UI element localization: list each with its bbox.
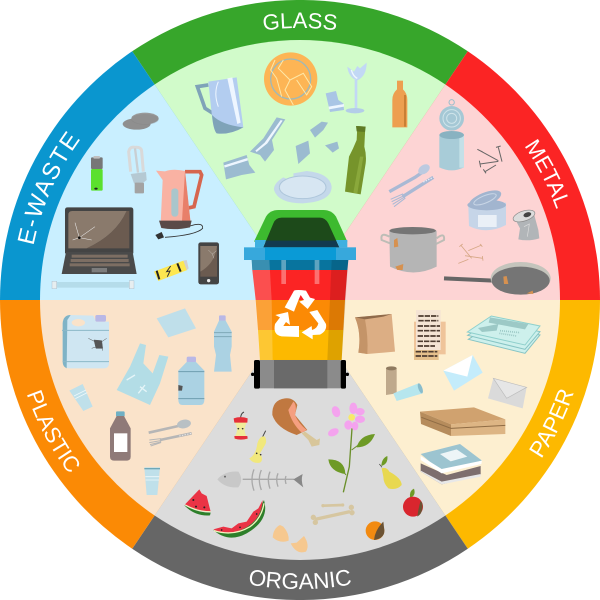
icon: cardboard box xyxy=(420,407,505,436)
icon: copper nails xyxy=(458,244,483,263)
icon: rotten orange xyxy=(366,521,384,540)
bin body xyxy=(252,260,348,360)
icon: water bottle xyxy=(214,315,232,372)
icon: bones xyxy=(311,503,355,525)
label: PAPER: PAPER xyxy=(529,390,574,458)
icon: energy-saving bulb xyxy=(129,147,147,193)
label: ORGANIC: ORGANIC xyxy=(250,570,351,590)
label: GLASS: GLASS xyxy=(264,12,336,30)
icon: cardboard tube xyxy=(386,366,397,395)
icon: cracked orange plate xyxy=(264,52,317,106)
icon: plastic canister xyxy=(62,315,109,368)
icon: orange bottle xyxy=(392,81,407,127)
icon: spoon and fork xyxy=(389,162,433,207)
icon: apple core xyxy=(234,412,248,440)
icon: broken glass plate xyxy=(274,171,332,203)
icon: rusty pot xyxy=(381,227,444,272)
icon: grey nails xyxy=(477,146,502,173)
icon: watermelon rind xyxy=(213,500,265,538)
bin lid xyxy=(254,210,347,247)
icon: pink flower xyxy=(327,403,375,492)
panel: organic items xyxy=(184,398,423,552)
icon: button cell coins xyxy=(123,113,159,130)
icon: broken bottle neck xyxy=(250,117,285,162)
icon: rolled paper xyxy=(393,383,424,401)
icon: glass shards xyxy=(296,122,339,164)
icon: grey envelope xyxy=(488,378,527,408)
icon: broken goblet xyxy=(346,63,367,113)
panel: plastic items xyxy=(62,308,232,495)
icon: crushed can xyxy=(512,208,539,240)
icon: green wine bottle xyxy=(345,126,366,194)
label: METAL: METAL xyxy=(525,139,568,209)
icon: cracked laptop xyxy=(62,207,137,274)
panel: glass items xyxy=(197,52,407,203)
icon: plastic cup tilted xyxy=(69,384,93,411)
icon: receipts xyxy=(414,310,446,360)
icon: pink kettle xyxy=(155,170,203,239)
icon: glass shard with stripe xyxy=(326,91,344,112)
label: PLASTIC: PLASTIC xyxy=(27,390,80,472)
icon: open tin can xyxy=(439,100,464,170)
icon: recycling symbol xyxy=(275,290,326,339)
icon: yellow AA battery xyxy=(154,260,189,281)
panel: metal items xyxy=(381,100,551,295)
icon: brown bottle xyxy=(110,411,131,461)
bin base and wheels xyxy=(251,360,349,389)
panel: paper items xyxy=(355,310,540,484)
icon: plastic wrap xyxy=(157,308,196,337)
icon: pear core xyxy=(249,431,266,463)
icon: opened food tin xyxy=(466,187,506,230)
icon: paper bag xyxy=(355,314,395,354)
icon: pear xyxy=(379,456,402,489)
inner light sectors xyxy=(40,40,560,560)
icon: eggshells xyxy=(273,525,308,552)
icon: chicken leg xyxy=(272,398,320,447)
icon: cracked smartphone xyxy=(198,242,219,284)
label: E-WASTE: E-WASTE xyxy=(18,131,80,244)
icon: plastic spoon and fork xyxy=(149,419,192,446)
icon: plastic bag xyxy=(117,343,168,405)
icon: plastic cup upright xyxy=(144,467,160,495)
icon: green battery xyxy=(91,156,103,191)
icon: blue envelope xyxy=(443,355,483,391)
panel: e-waste items xyxy=(52,113,219,289)
icon: large water jug xyxy=(178,357,204,405)
icon: newspapers xyxy=(467,316,540,353)
icon: broken bottle base xyxy=(223,155,255,179)
icon: recycling bin xyxy=(244,210,356,389)
icon: fluorescent tube xyxy=(52,281,134,289)
icon: watermelon slice xyxy=(184,489,211,515)
icon: stack of books xyxy=(421,444,482,484)
icon: glass jug xyxy=(197,77,243,134)
icon: fish skeleton xyxy=(217,469,303,491)
bin rim xyxy=(244,247,356,260)
icon: red apple xyxy=(403,489,423,517)
icon: frying pan xyxy=(444,262,551,295)
